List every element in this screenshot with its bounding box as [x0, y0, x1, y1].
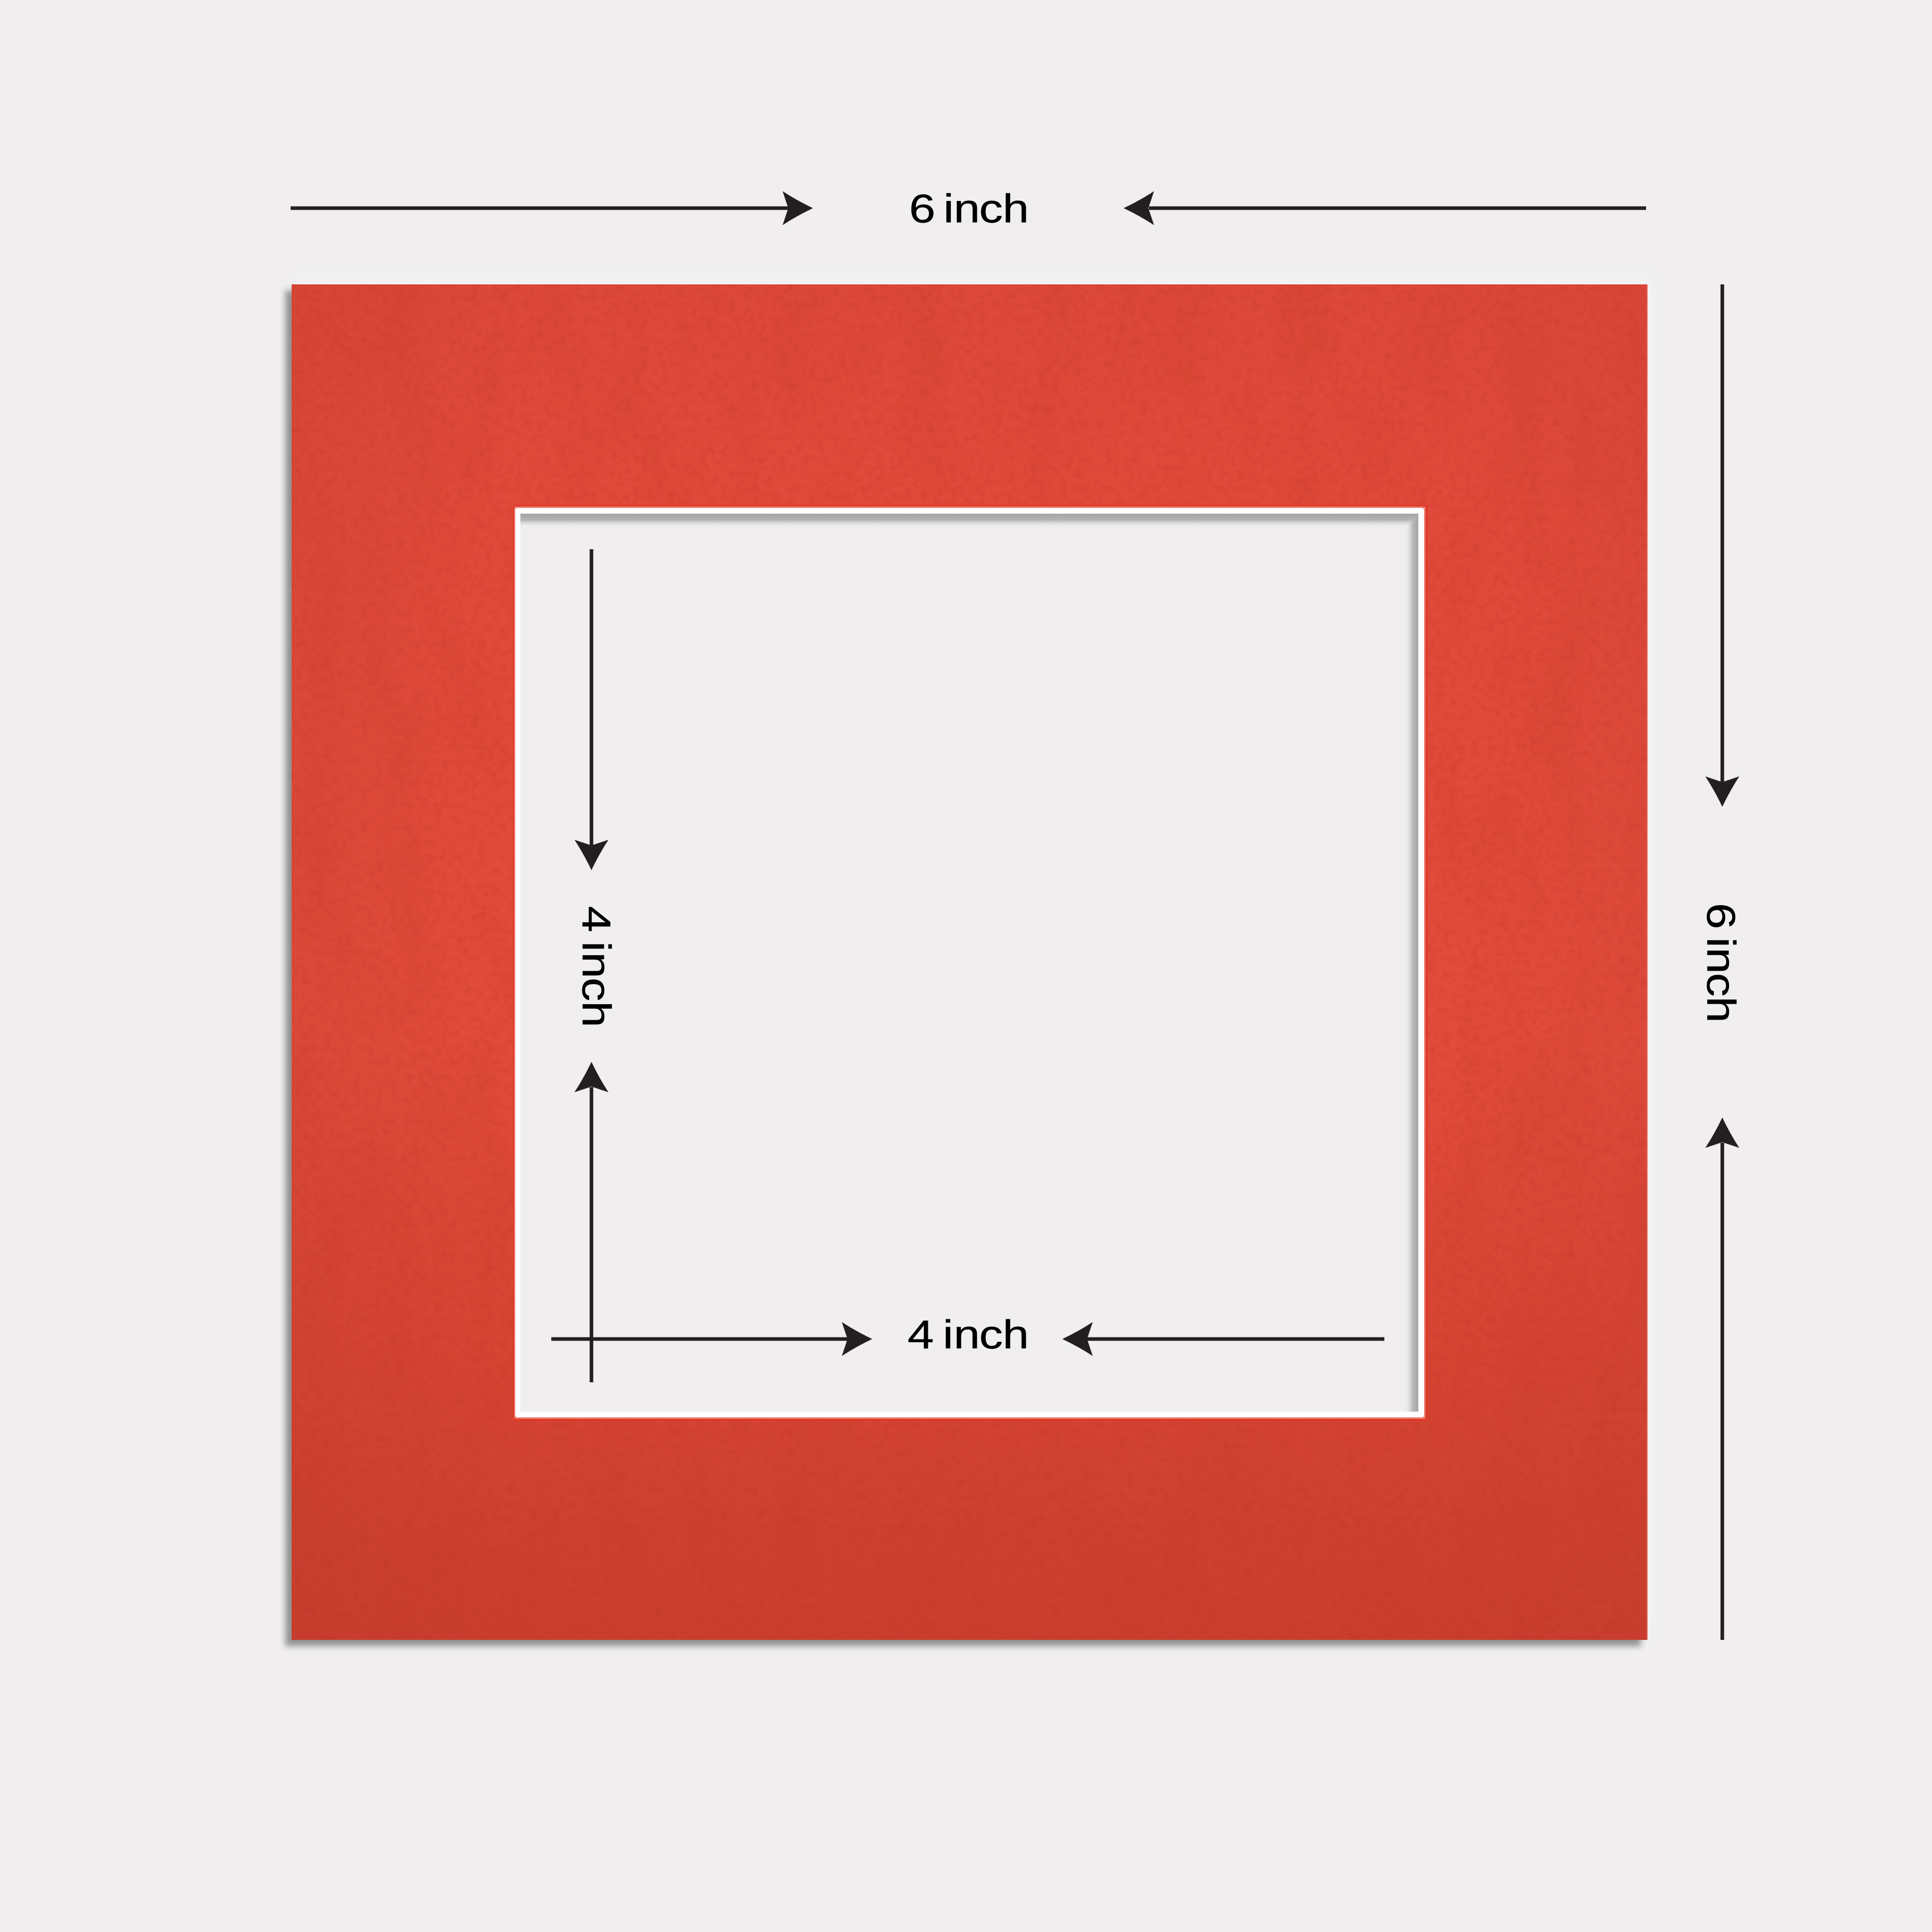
arrow: top right pointing left — [1124, 191, 1646, 225]
dimension: inner vertical 4 inch — [574, 549, 618, 1382]
label: 6 inch top: 6 inch — [909, 187, 1029, 231]
dimension: right 6 inch — [1699, 284, 1743, 1640]
dimension: top 6 inch — [291, 187, 1646, 231]
arrow: bottom pointing right — [551, 1322, 872, 1356]
panel: window opening — [513, 505, 1428, 1421]
mat surface — [292, 284, 1648, 1640]
arrow: top left pointing right — [291, 191, 813, 225]
right inner shadow — [1404, 514, 1418, 1412]
white bevel — [515, 508, 1424, 1417]
arrow: inner pointing down — [574, 549, 608, 870]
cut edge red line — [513, 505, 1428, 1421]
top inner shadow — [520, 514, 1418, 528]
label: 4 inch vertical: 4 inch — [574, 906, 618, 1027]
label: 4 inch bottom: 4 inch — [908, 1313, 1029, 1357]
window interior — [520, 514, 1418, 1412]
panel: red mat board — [285, 277, 1654, 1646]
arrow: right side pointing up — [1705, 1117, 1739, 1640]
arrow: bottom pointing left — [1062, 1322, 1384, 1356]
arrow: inner pointing up — [574, 1062, 608, 1382]
mat light halo — [297, 277, 1654, 1634]
arrow: right side pointing down — [1705, 284, 1739, 807]
mat drop shadow — [285, 291, 1641, 1646]
cut edge pink line — [514, 506, 1426, 1419]
dimension: inner horizontal 4 inch — [551, 1313, 1384, 1357]
label: 6 inch right: 6 inch — [1699, 903, 1743, 1023]
